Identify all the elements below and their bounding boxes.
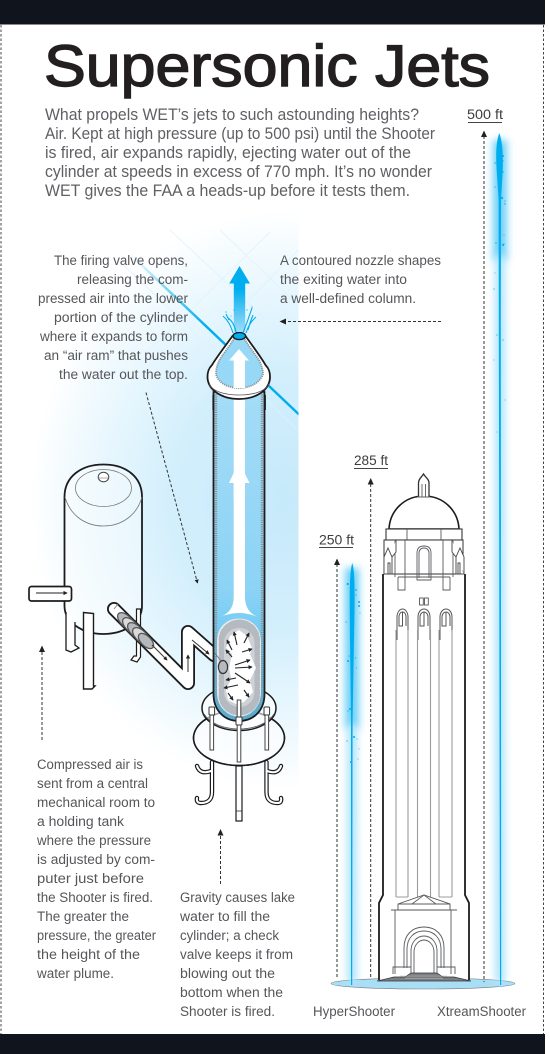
- upper arrow in column: [229, 462, 250, 500]
- entrance block: [391, 895, 457, 974]
- left callout: firing valve: pressed air into the lower: [38, 291, 189, 306]
- center lower text: cylinder; a check: [180, 928, 279, 943]
- diagonal blue line: [130, 254, 299, 414]
- left lower text: puter just before: [37, 871, 144, 886]
- drum arch: [417, 546, 431, 580]
- tower silhouette: [379, 574, 469, 980]
- left callout: firing valve: [38, 253, 189, 382]
- center lower text: Gravity causes lake: [180, 890, 295, 905]
- HyperShooter jet: [345, 563, 360, 985]
- nozzle opening: [233, 332, 246, 340]
- droplets: [493, 155, 506, 432]
- XtreamShooter jet: [493, 133, 507, 985]
- label: HyperShooter: HyperShooter: [313, 1004, 396, 1019]
- arch: [404, 927, 444, 968]
- hooks: [197, 762, 281, 803]
- corner turrets: [384, 540, 464, 574]
- left lower text: a holding tank: [37, 814, 124, 829]
- left callout: firing valve: releasing the com-: [77, 272, 188, 287]
- pool: [331, 978, 515, 989]
- bottom bar: [0, 1034, 545, 1054]
- left lower text: pressure, the greater: [37, 928, 157, 943]
- collar: [208, 336, 270, 399]
- left callout: firing valve: the water out the top.: [59, 367, 188, 382]
- right callout: nozzle: A contoured nozzle shapes: [280, 253, 441, 268]
- label: XtreamShooter: XtreamShooter: [437, 1004, 527, 1019]
- intro text: What propels WET’s jets to such astounding heights?: [45, 105, 419, 124]
- label: 250 ft: 250 ft: [319, 532, 354, 548]
- left lower text: sent from a central: [37, 776, 148, 791]
- left lower text: where the pressure: [36, 833, 151, 848]
- top bar: [0, 0, 545, 24]
- title: Supersonic Jets: [44, 34, 490, 99]
- tower shafts: [396, 630, 452, 897]
- arrow: nozzle callout: [280, 318, 441, 324]
- nozzle and collar: [208, 332, 270, 410]
- rods: [210, 708, 214, 750]
- white air column: [220, 380, 258, 617]
- center rod and bolts: [237, 700, 241, 720]
- intro text: Air. Kept at high pressure (up to 500 psi) until the Shooter: [45, 124, 435, 143]
- spray: [223, 308, 256, 333]
- cylinder body: [214, 392, 264, 721]
- right callout: nozzle: [280, 253, 441, 306]
- center lower text: blowing out the: [180, 966, 275, 981]
- upper arrow: [229, 349, 249, 388]
- left callout: firing valve: where it expands to form: [39, 329, 188, 344]
- pipe flow arrows: [152, 645, 167, 660]
- shooter base and legs: [194, 686, 284, 821]
- tank legs: [66, 612, 79, 652]
- center lower text: valve keeps it from: [180, 947, 293, 962]
- blue glow background: [54, 230, 298, 762]
- burst arrows: [224, 632, 252, 700]
- arrow: 250 ft height: [334, 558, 340, 978]
- inlet pipe: [29, 586, 72, 601]
- right callout: nozzle: the exiting water into: [280, 272, 407, 287]
- left lower text: mechanical room to: [37, 795, 155, 810]
- center lower text: Shooter is fired.: [180, 1004, 275, 1019]
- label: 285 ft: 285 ft: [354, 453, 388, 468]
- air ram chamber: [214, 619, 260, 716]
- arrow: up to base: [218, 829, 224, 884]
- left lower text: the height of the: [37, 947, 140, 962]
- left callout: firing valve: an “air ram” that pushes: [44, 348, 188, 363]
- intro text: is fired, air expands rapidly, ejecting water out of the: [45, 143, 411, 162]
- cone water: [216, 338, 263, 388]
- center lower text: bottom when the: [180, 985, 283, 1000]
- valve: [218, 660, 228, 674]
- left lower text: [36, 757, 157, 981]
- arrow: 500 ft height: [481, 130, 487, 982]
- shooter cylinder: [209, 380, 270, 725]
- left lower text: the Shooter is fired.: [37, 890, 153, 905]
- steps: [377, 973, 471, 981]
- left callout: firing valve: portion of the cylinder: [54, 310, 189, 325]
- center lower text: water to fill the: [179, 909, 270, 924]
- arched windows: [397, 609, 452, 640]
- flange: [202, 686, 276, 730]
- right callout: nozzle: a well-defined column.: [280, 291, 416, 306]
- left callout: firing valve: The firing valve opens,: [54, 253, 188, 268]
- pipe coil: [115, 610, 156, 651]
- holding tank: [29, 464, 214, 689]
- label: 500 ft: 500 ft: [467, 107, 503, 122]
- left lower text: water plume.: [36, 966, 114, 981]
- water jet arrow from nozzle: [223, 266, 256, 333]
- arrow: firing valve callout to chamber: [146, 392, 198, 583]
- intro text: cylinder at speeds in excess of 770 mph. It’s no wonder: [45, 162, 432, 181]
- center lower text: [179, 890, 295, 1019]
- arrow: up to tank: [39, 646, 45, 740]
- lantern: [418, 474, 429, 497]
- left lower text: Compressed air is: [37, 757, 143, 772]
- outlet pipe: [114, 609, 214, 683]
- arrow: 285 ft height: [368, 478, 374, 978]
- dome: [389, 496, 459, 529]
- intro text: WET gives the FAA a heads-up before it tests them.: [45, 181, 410, 200]
- droplets: [345, 583, 360, 763]
- intro text: [45, 105, 435, 200]
- small windows: [420, 598, 428, 605]
- drum: [386, 529, 462, 540]
- lower ellipse: [194, 710, 284, 766]
- left lower text: is adjusted by com-: [37, 852, 155, 867]
- tower: [377, 474, 471, 981]
- left lower text: The greater the: [37, 909, 129, 924]
